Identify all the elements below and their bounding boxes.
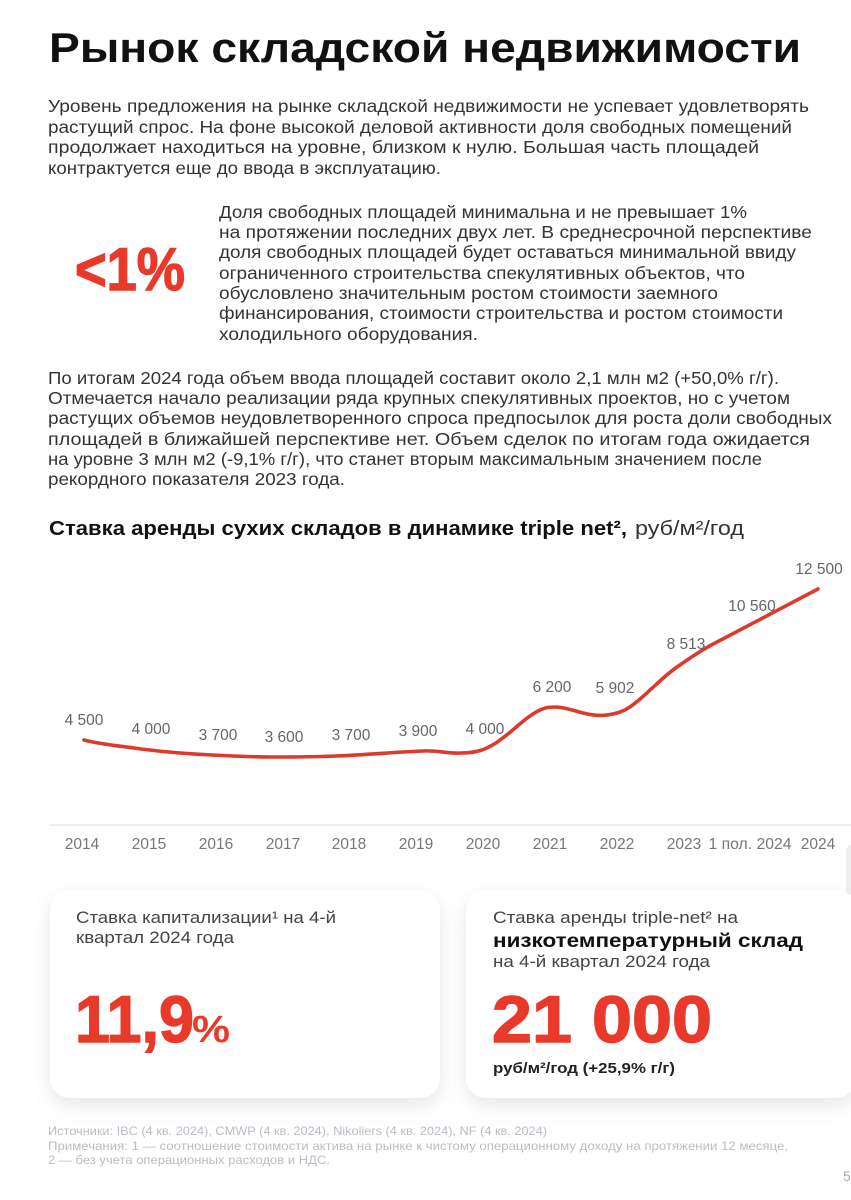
intro paragraph: продолжает находиться на уровне, близком к нулю. Большая часть площадей — [48, 137, 759, 157]
vacancy text block: ограниченного строительства спекулятивных объектов, что — [219, 263, 745, 283]
vacancy text block: на протяжении последних двух лет. В среднесрочной перспективе — [219, 222, 812, 242]
value labels: 3 900 — [399, 723, 438, 740]
card caption: низкотемпературный склад — [493, 931, 803, 952]
supply and deals paragraph: на уровне 3 млн м2 (-9,1% г/г), что станет вторым максимальным значением после — [48, 449, 762, 469]
card caption: Ставка аренды triple-net² на — [493, 909, 739, 927]
vacancy text block: финансирования, стоимости строительства и ростом стоимости — [219, 303, 783, 323]
vacancy text block: доля свободных площадей будет оставаться минимальной ввиду — [219, 242, 796, 262]
year axis labels: 2016 — [199, 836, 233, 853]
vacancy text block — [219, 202, 812, 344]
supply and deals paragraph: По итогам 2024 года объем ввода площадей составит около 2,1 млн м2 (+50,0% г/г). — [48, 368, 779, 388]
panel: low-temperature warehouse rent — [466, 890, 851, 1098]
line chart: dry warehouse rent — [49, 561, 851, 853]
year axis labels: 2017 — [266, 836, 300, 853]
chart heading: Ставка аренды сухих складов в динамике triple net², — [49, 518, 627, 540]
value labels: 4 000 — [132, 721, 171, 738]
card caption: Ставка капитализации¹ на 4-й — [76, 909, 336, 927]
value labels: 8 513 — [667, 636, 705, 653]
value labels: 3 700 — [199, 727, 238, 744]
value labels: 5 902 — [596, 680, 634, 697]
year axis labels: 2022 — [600, 836, 634, 853]
sources and notes — [48, 1124, 788, 1167]
sources and notes: Источники: IBC (4 кв. 2024), CMWP (4 кв. 2024), Nikoliers (4 кв. 2024), NF (4 кв. 2024) — [48, 1124, 547, 1138]
value labels — [65, 561, 843, 746]
vacancy text block: холодильного оборудования. — [219, 324, 478, 344]
value labels: 12 500 — [795, 561, 843, 578]
value labels: 3 700 — [332, 727, 371, 744]
year axis labels: 2018 — [332, 836, 366, 853]
card caption — [493, 909, 803, 971]
year axis labels: 2024 — [801, 836, 836, 853]
card unit: руб/м²/год (+25,9% г/г) — [493, 1060, 675, 1077]
sources and notes: 2 — без учета операционных расходов и НДС. — [48, 1153, 330, 1167]
year axis labels: 2020 — [466, 836, 501, 853]
title: Рынок складской недвижимости — [49, 24, 801, 71]
intro paragraph — [48, 96, 809, 178]
year axis labels: 2014 — [65, 836, 100, 853]
key figure: less than 1%: <1% — [75, 236, 185, 303]
card figure: 21 000 — [492, 982, 712, 1056]
card caption: на 4-й квартал 2024 года — [493, 953, 711, 971]
chart heading: руб/м²/год — [635, 518, 744, 540]
right edge scrap — [846, 845, 851, 895]
value labels: 4 000 — [466, 721, 505, 738]
supply and deals paragraph: площадей в ближайшей перспективе нет. Объем сделок по итогам года ожидается — [48, 429, 810, 449]
vacancy text block: Доля свободных площадей минимальна и не превышает 1% — [219, 202, 747, 222]
card figure: 11,9 — [75, 982, 194, 1056]
year axis labels: 2021 — [533, 836, 567, 853]
intro paragraph: растущий спрос. На фоне высокой деловой активности доля свободных помещений — [48, 117, 792, 137]
rent trend line — [84, 589, 818, 757]
value labels: 6 200 — [533, 679, 572, 696]
supply and deals paragraph: растущих объемов неудовлетворенного спроса предпосылок для роста доли свободных — [48, 408, 832, 428]
year axis labels: 2023 — [667, 836, 701, 853]
card figure: % — [192, 1009, 230, 1051]
supply and deals paragraph: Отмечается начало реализации ряда крупных спекулятивных проектов, но с учетом — [48, 388, 790, 408]
card caption — [76, 909, 336, 947]
value labels: 4 500 — [65, 712, 104, 729]
year axis labels: 2019 — [399, 836, 433, 853]
intro paragraph: контрактуется еще до ввода в эксплуатацию. — [48, 158, 441, 178]
value labels: 10 560 — [728, 598, 776, 615]
year axis labels: 2015 — [132, 836, 166, 853]
year axis labels: 1 пол. 2024 — [708, 836, 792, 853]
panel: capitalization rate — [50, 890, 440, 1098]
card caption: квартал 2024 года — [76, 929, 235, 947]
supply and deals paragraph — [48, 368, 832, 489]
vacancy text block: обусловлено значительным ростом стоимости заемного — [219, 283, 718, 303]
supply and deals paragraph: рекордного показателя 2023 года. — [48, 469, 345, 489]
intro paragraph: Уровень предложения на рынке складской недвижимости не успевает удовлетворять — [48, 96, 809, 116]
page number: 5 — [843, 1168, 851, 1184]
value labels: 3 600 — [265, 729, 304, 746]
year axis labels — [65, 836, 836, 853]
sources and notes: Примечания: 1 — соотношение стоимости актива на рынке к чистому операционному доходу на протяжении 12 месяце, — [48, 1139, 788, 1153]
